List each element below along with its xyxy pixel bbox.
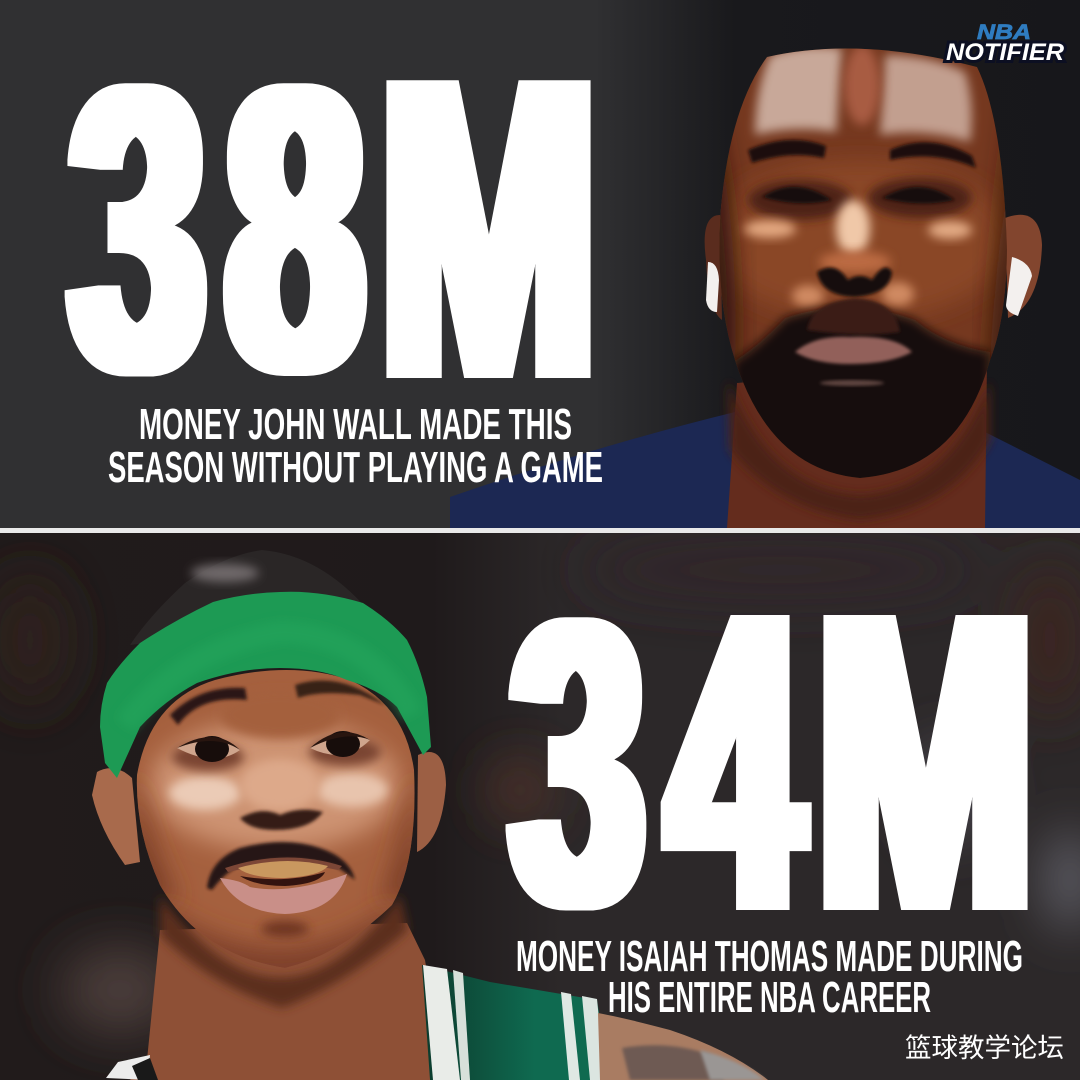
stat: 34M: 3	[511, 536, 644, 989]
stat: 34M	[511, 528, 1034, 997]
stat: 38M: 8	[226, 2, 364, 455]
panel: Isaiah Thomas	[0, 533, 1080, 1080]
hair	[130, 550, 368, 645]
jersey: green	[422, 965, 610, 1080]
caption: Isaiah Thomas	[516, 932, 1023, 1022]
jersey: navy	[450, 412, 1080, 528]
stat: 34M: 4	[668, 528, 804, 997]
portrait: Isaiah Thomas	[92, 550, 768, 1080]
caption: John Wall	[108, 400, 603, 492]
icon: earbuds	[706, 257, 1032, 316]
watermark: 篮球教学论坛	[905, 1033, 1064, 1063]
stat: 38M: 3	[70, 2, 205, 455]
portrait: John Wall	[700, 30, 1042, 528]
headband	[100, 592, 431, 778]
ears	[92, 768, 140, 865]
stat: 38M: M	[380, 0, 597, 465]
face	[136, 670, 415, 968]
caption: John Wall: SEASON WITHOUT PLAYING A GAME	[108, 443, 603, 492]
logo: NBA Notifier: NBA	[977, 21, 1031, 44]
bokeh background	[0, 540, 1080, 1035]
divider	[0, 528, 1080, 533]
stat: 38M	[70, 0, 597, 465]
caption: John Wall: MONEY JOHN WALL MADE THIS	[139, 400, 572, 449]
panel: John Wall	[450, 0, 1080, 528]
logo: NBA Notifier: NOTIFIER	[946, 39, 1065, 66]
logo: NBA Notifier	[946, 21, 1065, 66]
